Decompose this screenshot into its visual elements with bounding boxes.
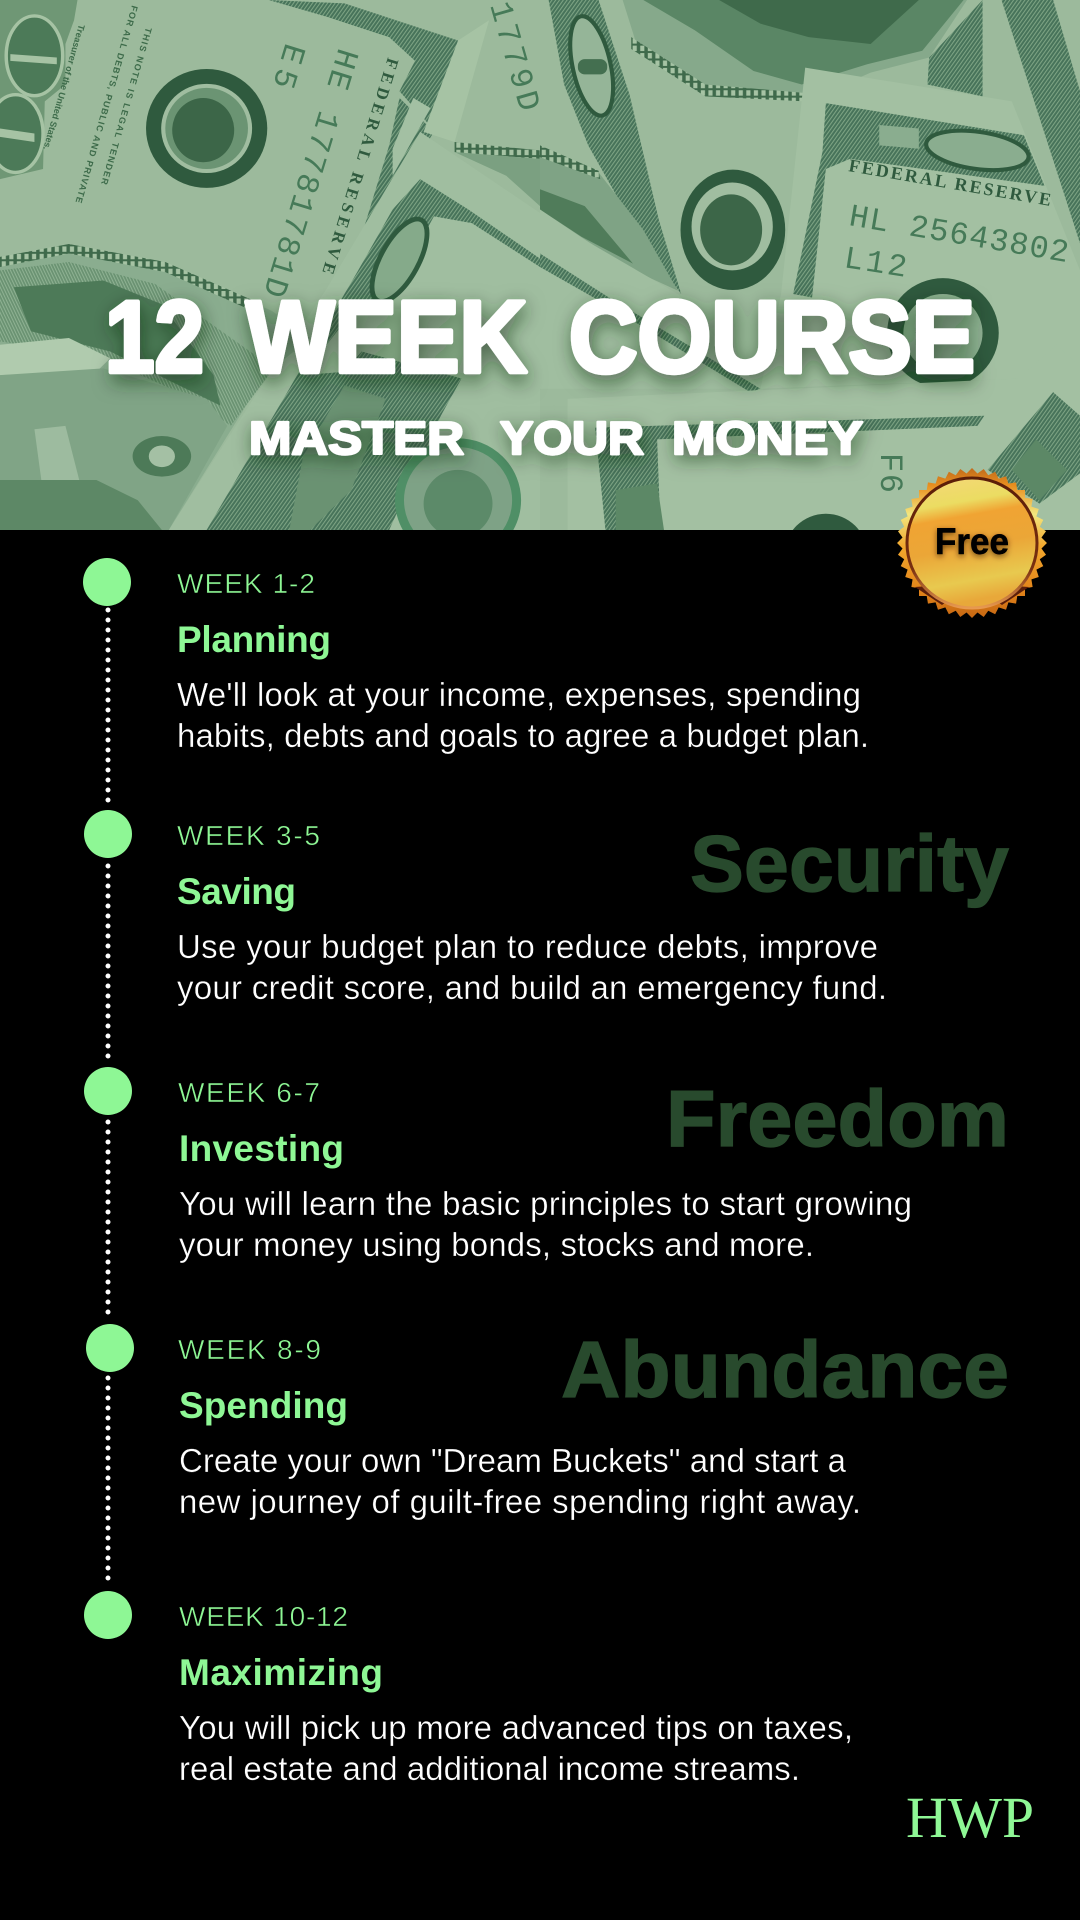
banknote serial numbers and fine print: E5 bbox=[263, 39, 312, 93]
timeline dotted line bbox=[106, 610, 110, 1586]
timeline marker bbox=[84, 810, 132, 858]
subtitle: MONEY bbox=[672, 412, 863, 464]
banknote serial numbers and fine print: 1779D bbox=[480, 0, 547, 115]
portrait bbox=[0, 245, 310, 530]
subtitle: MASTER bbox=[249, 412, 464, 464]
badge text: Free bbox=[935, 521, 1009, 562]
description: real estate and additional income streams. bbox=[179, 1750, 800, 1787]
panel: week 1-2 planning bbox=[83, 558, 869, 754]
description bbox=[177, 676, 869, 754]
subtitle bbox=[249, 412, 863, 464]
subtitle: YOUR bbox=[500, 412, 644, 464]
description: You will pick up more advanced tips on taxes, bbox=[179, 1709, 853, 1746]
timeline marker bbox=[86, 1324, 134, 1372]
description bbox=[179, 1442, 861, 1520]
description: new journey of guilt-free spending right away. bbox=[179, 1483, 861, 1520]
banknote serial numbers and fine print: FEDERAL RESERVE bbox=[318, 56, 402, 277]
week label: WEEK 1-2 bbox=[177, 568, 315, 599]
heading: Investing bbox=[179, 1128, 344, 1169]
description: We'll look at your income, expenses, spending bbox=[177, 676, 861, 713]
bill 4 bbox=[748, 380, 970, 392]
treasury seal bbox=[395, 438, 522, 530]
description: Create your own "Dream Buckets" and start a bbox=[179, 1442, 847, 1479]
bill 3 bbox=[802, 68, 861, 102]
heading: Spending bbox=[179, 1385, 348, 1426]
description: your credit score, and build an emergency fund. bbox=[177, 969, 887, 1006]
curved portrait piece bbox=[540, 145, 678, 291]
description: your money using bonds, stocks and more. bbox=[179, 1226, 814, 1263]
heading: Saving bbox=[177, 871, 296, 912]
panel: week 6-7 investing bbox=[84, 1067, 912, 1263]
description: Use your budget plan to reduce debts, improve bbox=[177, 928, 878, 965]
title: COURSE bbox=[569, 281, 975, 394]
description bbox=[179, 1709, 853, 1787]
timeline marker bbox=[84, 1067, 132, 1115]
header photo: banknotes bbox=[0, 0, 1080, 530]
lower-right bill bbox=[988, 392, 1080, 504]
title: 12 bbox=[105, 281, 204, 394]
panel: week 10-12 maximizing bbox=[84, 1591, 853, 1787]
banknote serial numbers and fine print: HE 17781781D bbox=[254, 44, 365, 302]
banknote serial numbers and fine print: THIS NOTE IS LEGAL TENDER bbox=[99, 26, 154, 186]
week label: WEEK 8-9 bbox=[178, 1334, 321, 1365]
panel: week 3-5 saving bbox=[84, 810, 887, 1006]
watermark: Freedom: Freedom bbox=[666, 1074, 1009, 1163]
title bbox=[105, 281, 975, 394]
description: habits, debts and goals to agree a budget plan. bbox=[177, 717, 869, 754]
banknote serial numbers and fine print: FEDERAL RESERVE bbox=[847, 155, 1053, 210]
seal bbox=[146, 69, 267, 188]
right half of banknotes bbox=[540, 0, 1080, 530]
heading: Maximizing bbox=[179, 1652, 383, 1693]
diagonal bill ornament bbox=[549, 0, 681, 294]
banknote serial numbers and fine print: F6 bbox=[871, 453, 908, 493]
banknote serial numbers and fine print: Treasurer of the United States. bbox=[41, 23, 87, 151]
seal 2 bbox=[681, 170, 785, 290]
timeline marker bbox=[84, 1591, 132, 1639]
title: WEEK bbox=[246, 281, 527, 394]
watermark: Security: Security bbox=[690, 819, 1010, 908]
badge: Free seal bbox=[897, 468, 1047, 618]
description: You will learn the basic principles to start growing bbox=[179, 1185, 912, 1222]
watermark: Abundance: Abundance bbox=[561, 1325, 1009, 1414]
seal 3 bbox=[887, 278, 999, 388]
bill edge bbox=[424, 20, 489, 142]
week label: WEEK 3-5 bbox=[177, 820, 320, 851]
top-left numerals bbox=[0, 0, 77, 179]
top portrait bbox=[623, 0, 967, 101]
banknote serial numbers and fine print: FOR ALL DEBTS, PUBLIC AND PRIVATE bbox=[74, 4, 140, 204]
bill corner ornament bbox=[269, 0, 458, 130]
week label: WEEK 10-12 bbox=[179, 1601, 348, 1632]
description bbox=[179, 1185, 912, 1263]
panel: week 8-9 spending bbox=[86, 1324, 861, 1520]
banknote serial numbers and fine print: L12 bbox=[841, 240, 909, 287]
timeline marker bbox=[83, 558, 131, 606]
heading: Planning bbox=[177, 619, 331, 660]
left half of banknotes bbox=[0, 0, 540, 558]
banknote serial numbers and fine print bbox=[41, 0, 1071, 493]
middle bill bbox=[363, 132, 430, 230]
week label: WEEK 6-7 bbox=[178, 1077, 320, 1108]
logo: HWP: HWP bbox=[906, 1785, 1034, 1850]
banknote serial numbers and fine print: HL 25643802 bbox=[846, 198, 1071, 272]
description bbox=[177, 928, 887, 1006]
